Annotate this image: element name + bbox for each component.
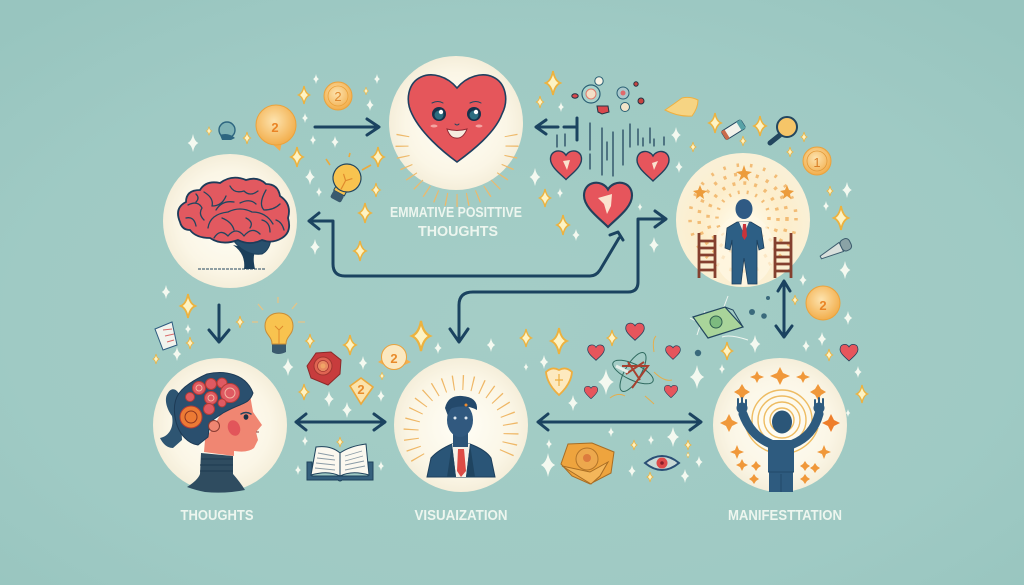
panel: manifestation circle [713, 358, 847, 492]
icon: atom knot [610, 336, 672, 404]
icon: gold shield: 2 [357, 382, 365, 397]
icon: scroll note [665, 97, 698, 116]
icon: coin with wings: 2 [390, 351, 398, 366]
icon: magnifier [770, 117, 797, 143]
arrow: visualization to manifestation [538, 414, 701, 430]
icon: coin 2 [324, 82, 352, 110]
icon: orange rose [561, 443, 614, 484]
heading: emmative positive thoughts [390, 205, 522, 240]
icon: red rose [307, 352, 341, 385]
icon: paper note [155, 322, 177, 350]
panel: brain circle [163, 154, 297, 288]
arrow: woman to visualization [296, 414, 385, 430]
icon: tube [721, 119, 746, 140]
panel: woman circle [153, 358, 287, 493]
icon: ladders [699, 233, 791, 278]
icon: gold shield [350, 378, 373, 404]
heart rays [402, 135, 512, 200]
radiating rays [411, 382, 511, 458]
icon: coin 2 lower right [806, 286, 840, 320]
label: thoughts: THOUGHTS [180, 508, 254, 524]
icon: top orbs cluster [572, 77, 644, 114]
money dots [695, 296, 770, 356]
icon: brain [178, 178, 289, 269]
falling dash lines [557, 123, 664, 176]
icons: small hearts [584, 323, 858, 399]
icon: coin 2: 2 [334, 89, 342, 104]
icon: smiling heart [408, 75, 506, 162]
icon: money [690, 296, 748, 340]
icon: small heart left [550, 151, 582, 180]
arrow: from hearts leftward [536, 118, 577, 140]
icon: coin with wings [378, 344, 411, 370]
icon: helmet [219, 122, 235, 140]
icon: big heart [584, 183, 632, 227]
arrow: branch to visualization and ladders [450, 211, 666, 342]
icon: speech coin 2: 2 [271, 120, 279, 135]
arrow: to heart [315, 119, 379, 135]
icon: open book [307, 444, 373, 481]
icon: tilted light bulb [323, 153, 371, 207]
glow stars [693, 165, 794, 199]
icon: coin 1 [803, 147, 831, 175]
icon: eye [645, 456, 679, 470]
icon: coin 2 lower right: 2 [819, 298, 827, 313]
panel: person with ladders circle [676, 153, 810, 287]
panel: heart circle [389, 56, 523, 200]
sparkles: scattered gold [153, 71, 867, 482]
icon: speech coin 2 [256, 105, 296, 151]
orange stars [720, 367, 840, 484]
label: manifestation: MANIFESTTATION [728, 508, 842, 524]
panel: visualization circle [394, 358, 528, 492]
sparkles: scattered white [162, 74, 862, 483]
icon: microphone [818, 237, 853, 262]
arrow: loop to brain and up to hearts [309, 213, 623, 276]
heading: emmative positive thoughts: EMMATIVE POSITTIVE [390, 205, 522, 221]
icon: light bulb [252, 297, 305, 354]
radiating glow dashes [690, 165, 796, 271]
icon: small heart right [637, 151, 669, 181]
concentric rings [746, 390, 818, 454]
icon: coin 1: 1 [813, 155, 821, 170]
label: visualization: VISUAIZATION [414, 508, 508, 524]
icon: figure with raised arms [736, 398, 824, 492]
icon: man in suit [427, 396, 495, 477]
arrow: brain down to woman [209, 305, 229, 342]
heading: emmative positive thoughts: THOUGHTS [418, 224, 498, 240]
arrow: ladders to manifestation [776, 281, 792, 337]
icon: woman profile [160, 373, 262, 493]
icon: flowers in head [180, 378, 240, 428]
icon: gold heart shield [546, 368, 572, 395]
icon: man in suit [725, 199, 764, 284]
